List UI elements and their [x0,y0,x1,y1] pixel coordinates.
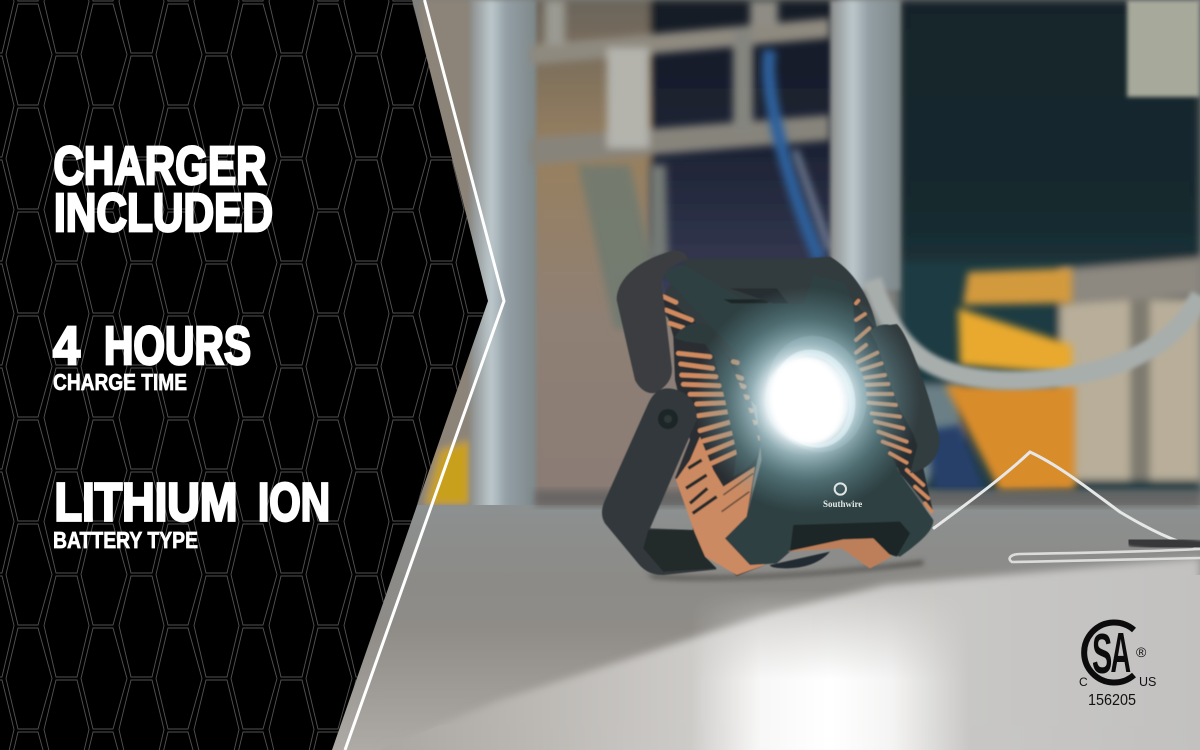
feature: 4 hours charge time: 4 [53,316,80,376]
brand logo on light: Southwire [823,499,862,509]
light shadow [647,560,923,580]
right fin backing [853,300,933,513]
CSA certification mark: C [1079,675,1088,689]
feature: lithium ion battery type: BATTERY TYPE [53,527,198,553]
feature: charger included [54,136,273,243]
inner arm right [870,325,940,473]
feature: lithium ion battery type [53,472,330,553]
fold-out leg [602,388,717,575]
left fin backing [662,293,765,576]
lens ring [755,325,879,463]
photo background: blurred worksite [330,0,1200,750]
light glow [693,287,920,513]
base orange [787,538,892,568]
feature: 4 hours charge time [53,316,251,395]
CSA certification mark: S [1092,622,1112,685]
feature: lithium ion battery type: ION [258,472,330,532]
feature: lithium ion battery type: LITHIUM [54,472,238,532]
feature: charger included: INCLUDED [54,183,273,243]
feature: charger included: CHARGER [54,136,266,196]
right fins [856,301,932,512]
central body [664,266,933,565]
power cord [934,452,1200,562]
rear frame [657,257,939,473]
CSA certification mark: 156205 [1088,692,1136,709]
feature: 4 hours charge time: CHARGE TIME [53,369,187,395]
white chevron line [345,0,504,750]
black chevron panel [0,0,488,750]
floor [330,490,1200,750]
left fins [663,297,759,464]
feature: 4 hours charge time: HOURS [104,316,251,376]
CSA certification mark: US [1139,675,1156,689]
CSA certification mark: ® [1136,644,1147,660]
CSA certification mark: A [1110,620,1131,685]
inner arm left [675,323,760,477]
pivot knob [658,409,678,429]
brand logo on light [823,483,862,509]
upper left handle [617,251,687,393]
CSA certification mark [1079,620,1156,709]
work light [602,251,940,580]
